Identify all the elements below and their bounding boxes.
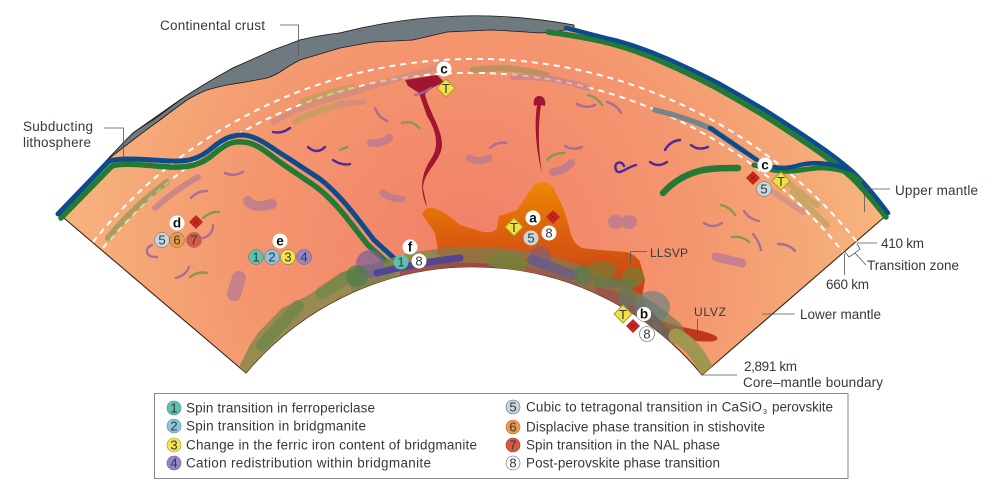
marker group e: 3 (284, 250, 292, 264)
label: lower mantle: Lower mantle (800, 307, 881, 322)
label: continental crust: Continental crust (160, 18, 265, 33)
label: 410 km: 410 km (881, 236, 924, 251)
marker group c top: c (440, 62, 448, 76)
legend item 7: 7 (509, 438, 517, 452)
label: transition zone: Transition zone (867, 258, 959, 273)
label: core-mantle boundary (702, 359, 883, 390)
legend item 8: Post-perovskite phase transition (526, 456, 720, 470)
legend item 1: Spin transition in ferropericlase (186, 400, 375, 416)
squiggles (147, 88, 795, 278)
LLSVP (422, 182, 655, 330)
marker group a: 5 (527, 230, 535, 246)
legend item 6: Displacive phase transition in stishovite (526, 420, 765, 434)
legend item 5 (506, 400, 833, 416)
marker group a: a (529, 210, 537, 226)
marker group f: 8 (415, 254, 423, 268)
label: subducting lithosphere (23, 119, 124, 158)
marker group e: e (276, 234, 284, 248)
slab remnants in transition zone (108, 68, 827, 238)
marker group d (154, 215, 203, 248)
label: continental crust (160, 18, 298, 55)
marker group d: 7 (190, 232, 198, 248)
subducting lithosphere right (548, 28, 888, 217)
piles at core-mantle boundary (240, 246, 708, 390)
subducting lithosphere left (58, 135, 396, 266)
legend item 3: 3 (170, 438, 178, 452)
plume 2 (534, 96, 545, 173)
legend item 2: Spin transition in bridgmanite (186, 418, 366, 434)
slab blue top (710, 128, 850, 170)
label: 410 km (857, 236, 924, 251)
label: subducting lithosphere: lithosphere (23, 135, 91, 150)
continental crust (107, 16, 574, 160)
label: 660 km (826, 254, 869, 292)
410 km discontinuity (93, 59, 857, 242)
label: ULVZ (694, 305, 726, 334)
legend item 5: 5 (509, 400, 517, 414)
marker group b (614, 305, 654, 342)
marker group c right (746, 158, 790, 196)
marker group b: T (619, 307, 627, 322)
660 km discontinuity (103, 73, 843, 252)
label: subducting lithosphere: Subducting (23, 119, 93, 134)
legend item 1: 1 (170, 400, 178, 416)
marker group c top: T (442, 81, 450, 96)
marker group c right: T (777, 174, 785, 189)
detached green slab (663, 168, 738, 193)
label: core-mantle boundary: 2,891 km (744, 359, 797, 374)
marker group a: 8 (545, 226, 553, 240)
label: transition zone (845, 244, 959, 273)
legend item 5: perovskite (772, 400, 833, 414)
legend item 4: 4 (170, 456, 178, 470)
marker group b: b (640, 306, 648, 322)
legend item 4: Cation redistribution within bridgmanite (186, 456, 431, 470)
label: LLSVP: LLSVP (650, 246, 688, 260)
marker group b: 8 (643, 326, 651, 342)
label: upper mantle: Upper mantle (895, 183, 978, 198)
marker group e: 2 (268, 250, 276, 264)
marker group f: f (408, 240, 413, 254)
lower-mantle structures clipped at core-mantle boundary (240, 182, 717, 390)
label: ULVZ: ULVZ (694, 305, 726, 319)
ULVZ (660, 320, 718, 342)
slab green underside (754, 165, 860, 181)
legend item 5: 3 (763, 409, 767, 416)
stagnant slab grey part (655, 110, 745, 152)
marker group d: 6 (173, 232, 181, 248)
label: upper mantle (864, 183, 978, 212)
legend item 8: 8 (509, 456, 517, 470)
legend (154, 394, 848, 478)
legend item 2: 2 (170, 418, 178, 434)
marker group e: 1 (252, 250, 260, 264)
marker group e (248, 234, 312, 264)
label: core-mantle boundary: Core–mantle boundary (743, 375, 883, 390)
marker group a: T (510, 220, 518, 235)
marker group c right: c (761, 158, 769, 172)
label: lower mantle (762, 307, 881, 322)
legend item 7: Spin transition in the NAL phase (526, 438, 720, 452)
marker group c right: 5 (760, 182, 768, 196)
legend item 6: 6 (509, 420, 517, 434)
marker group f: 1 (397, 254, 405, 270)
marker group a (505, 210, 560, 246)
marker group d: 5 (158, 232, 166, 248)
marker group d: d (173, 216, 181, 230)
legend item 3: Change in the ferric iron content of bridgmanite (186, 438, 477, 452)
label: 660 km: 660 km (826, 277, 869, 292)
label: LLSVP (630, 246, 688, 263)
marker group e: 4 (300, 250, 308, 264)
marker group f (394, 240, 426, 270)
marker group c top (436, 62, 455, 97)
blobs (234, 138, 742, 294)
mantle cross-section (58, 17, 889, 375)
plume c (405, 75, 444, 207)
legend item 5: Cubic to tetragonal transition in CaSiO (526, 400, 762, 414)
